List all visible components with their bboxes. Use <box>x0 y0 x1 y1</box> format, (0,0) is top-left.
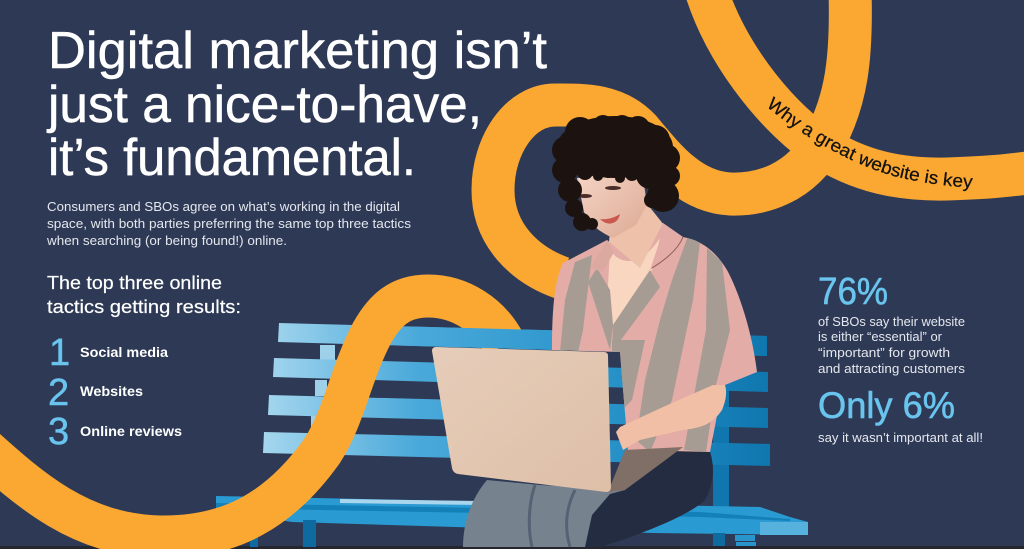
stat 76%: “important” for growth <box>818 345 950 360</box>
laptop lid <box>432 347 611 492</box>
numbers: 1 <box>49 332 70 374</box>
stat 76%: 76% <box>818 271 888 313</box>
upper orange ribbon <box>493 0 1024 278</box>
title: Digital marketing isn’t <box>48 22 548 80</box>
woman <box>432 115 765 547</box>
forearm <box>616 385 726 450</box>
bench legs <box>250 520 725 547</box>
bench supports <box>311 345 335 433</box>
stat 76%: is either “essential” or <box>818 329 943 344</box>
list labels: Websites <box>80 383 143 399</box>
bench slats <box>263 323 770 466</box>
numbers: 3 <box>48 411 69 453</box>
bench <box>216 323 808 547</box>
neck <box>608 205 664 275</box>
title <box>46 22 548 187</box>
title: it’s fundamental. <box>48 129 416 187</box>
list labels: Online reviews <box>80 423 182 439</box>
ribbon label: Why a great website is key <box>768 96 973 192</box>
intro paragraph: space, with both parties preferring the same top three tactics <box>47 216 412 231</box>
numbers: 2 <box>48 372 69 414</box>
stat 76%: of SBOs say their website <box>818 314 965 329</box>
shirt stripes <box>560 236 730 452</box>
intro paragraph <box>46 199 412 248</box>
eyes and lips <box>578 186 621 224</box>
numbers <box>48 332 70 453</box>
lower orange ribbon <box>0 296 505 537</box>
t-shirt <box>608 238 660 325</box>
ranked list <box>48 332 182 453</box>
face <box>577 170 647 238</box>
collar <box>650 223 683 270</box>
stat only 6%: say it wasn’t important at all! <box>818 430 983 445</box>
lapels <box>588 268 613 350</box>
stat only 6% <box>818 385 983 445</box>
stat 76%: and attracting customers <box>818 361 966 376</box>
bench seat <box>216 496 808 535</box>
title: just a nice-to-have, <box>46 76 482 134</box>
top slat right part over ribbon <box>397 326 767 356</box>
laptop base <box>608 447 683 492</box>
list labels <box>80 344 182 439</box>
subheading <box>47 272 241 317</box>
subheading: The top three online <box>47 272 222 293</box>
shirt <box>552 223 757 452</box>
stat only 6%: Only 6% <box>818 385 955 426</box>
intro paragraph: when searching (or being found!) online. <box>46 233 287 248</box>
intro paragraph: Consumers and SBOs agree on what’s working in the digital <box>47 199 400 214</box>
jeans <box>463 446 713 547</box>
stat 76% <box>818 271 966 376</box>
subheading: tactics getting results: <box>47 296 241 317</box>
list labels: Social media <box>80 344 168 360</box>
hair <box>552 115 680 231</box>
